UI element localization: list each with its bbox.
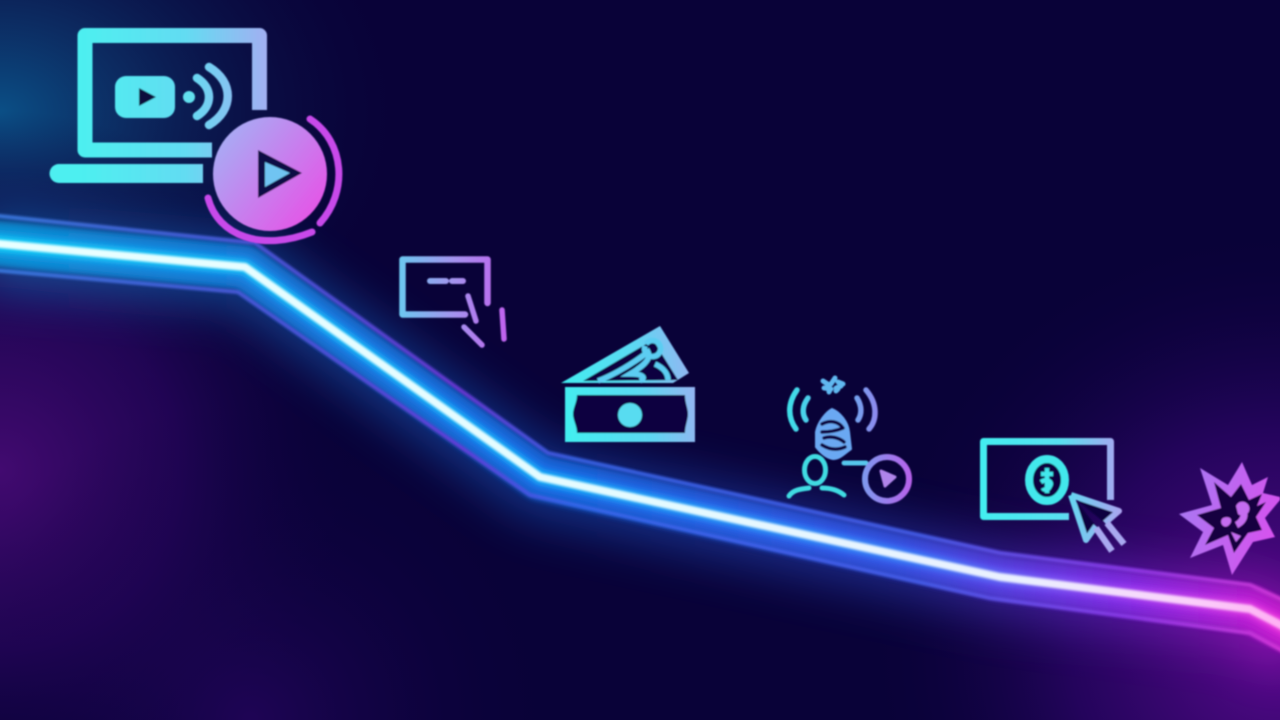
laptop screen frame [85, 36, 260, 150]
burst above bell [823, 378, 843, 392]
burst outline [1179, 462, 1280, 575]
signal waves left [790, 390, 808, 429]
play button disc [213, 117, 327, 231]
screen outline [402, 260, 488, 314]
icon: coin screen with cursor [984, 442, 1124, 551]
person shoulders [789, 488, 844, 496]
connector [844, 460, 866, 466]
icon: person with bell and video [789, 378, 909, 501]
screen outline [984, 442, 1110, 516]
cursor arrow [1071, 495, 1119, 540]
upper note cut-out [583, 340, 678, 381]
person head [804, 456, 826, 484]
play triangle inner [265, 162, 290, 187]
play button ring [208, 119, 339, 241]
bell stripes [822, 422, 845, 449]
dash pair [430, 278, 463, 284]
upper note [561, 326, 689, 383]
signal waves right [857, 390, 875, 429]
coin symbol [1041, 468, 1053, 493]
video play triangle [139, 88, 156, 106]
icon: screen with click marks [402, 260, 504, 345]
upper note motif [598, 341, 668, 381]
video player badge [115, 76, 175, 118]
neon declining line [0, 214, 1280, 660]
click marks [464, 296, 504, 345]
lower note cut-out [573, 395, 688, 433]
cursor tail [1096, 523, 1124, 551]
video ring [865, 457, 909, 501]
icon: explosion burst [1179, 462, 1280, 575]
play button triangle [258, 150, 302, 198]
icon: banknotes [561, 326, 695, 442]
coin [618, 403, 642, 427]
broadcast dot [183, 91, 195, 103]
icon: laptop with video and play button [50, 36, 339, 241]
bell [816, 409, 851, 459]
burst fragments [1221, 502, 1249, 542]
broadcast waves [197, 67, 228, 125]
laptop base [50, 164, 203, 183]
lower note [565, 387, 695, 442]
burst cut-out [1197, 482, 1266, 553]
coin ring [1029, 459, 1065, 501]
video triangle [881, 471, 895, 486]
